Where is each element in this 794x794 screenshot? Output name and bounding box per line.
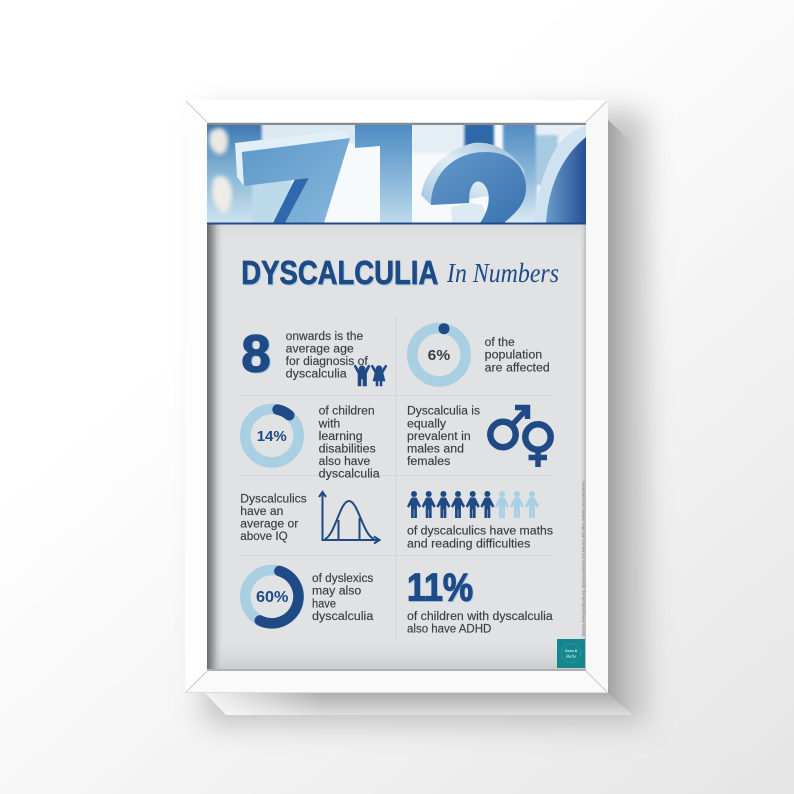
stat: 14% donut: 14% [257,428,287,445]
stat: 60% donut: dyscalculia [312,611,374,623]
logo badge: Belle [566,655,577,660]
stat: IQ bell curve: Dyscalculics [240,493,307,505]
vertical source note: Source: www.dyscalculia.org, dyslexia research and learning difficulties statistics and publications [582,481,586,636]
stat: age 8 [242,326,387,386]
header image: 3D numbers [205,120,586,224]
icon: children [354,365,387,386]
stat: 6% donut: of the [485,337,515,349]
stat: 60% donut: 60% [256,589,289,606]
stat: IQ bell curve: average or [240,519,298,531]
stat: 14% donut: with [318,418,340,430]
stat: people pictogram [407,491,553,550]
stat: 60% donut: may also [312,586,361,598]
stat: age 8: dyscalculia [286,369,347,381]
icon: bell curve chart [319,492,380,544]
stat: 60% donut [245,570,374,623]
stat: 14% donut: also have [319,456,370,468]
icon: male and female symbols [490,408,551,467]
numeral 7 [235,130,350,223]
stat: 11% ADHD: 11% [408,568,474,611]
stat: 14% donut: disabilities [319,443,376,455]
stat: IQ bell curve: above IQ [240,531,288,543]
title: In Numbers [446,258,559,288]
stat: age 8: 8 [243,326,272,384]
numeral 0 [534,126,586,223]
stat: 11% ADHD: 11% [407,567,473,610]
stat: gender equality [407,406,551,468]
stat: age 8: average age [286,344,354,356]
numeral 2 [421,143,526,223]
stat: age 8: 8 [242,326,270,384]
stat: 14% donut: learning [319,431,363,443]
title: DYSCALCULIA [241,254,438,291]
stat: 6% donut [412,323,550,381]
picture frame [185,100,608,693]
stat: gender equality: prevalent in [407,431,471,443]
stat: IQ bell curve: have an [240,506,283,518]
stat: 11% ADHD: of children with dyscalculia [407,611,553,623]
stat: age 8: for diagnosis of [286,356,369,368]
stat: gender equality: females [407,456,451,468]
stat: gender equality: equally [407,418,446,430]
grid dividers [240,316,553,640]
stat: 11% ADHD [407,567,553,636]
soft shadow halo [205,112,645,724]
stat: 60% donut: have [312,598,336,610]
stat: 6% donut: 6% [428,347,450,364]
stat: gender equality: males and [407,443,464,455]
stat: age 8: onwards is the [286,331,363,343]
stat: 14% donut [245,406,380,481]
stat: 14% donut: of children [319,406,375,418]
frame cast shadow [205,120,633,715]
stat: 60% donut: of dyslexics [312,573,374,585]
stat: 11% ADHD: also have ADHD [407,624,491,636]
poster [205,120,586,671]
title: DYSCALCULIA [242,256,440,292]
stat: IQ bell curve [240,492,380,544]
logo badge [557,639,585,668]
stat: 6% donut: population [485,350,542,362]
logo badge: Coco & [565,649,578,653]
stat: people pictogram: of dyscalculics have maths [407,526,553,538]
stat: 14% donut: dyscalculia [319,469,380,481]
stat: people pictogram: and reading difficulties [407,538,531,550]
stat: 6% donut: are affected [485,362,550,374]
stat: gender equality: Dyscalculia is [407,406,480,418]
